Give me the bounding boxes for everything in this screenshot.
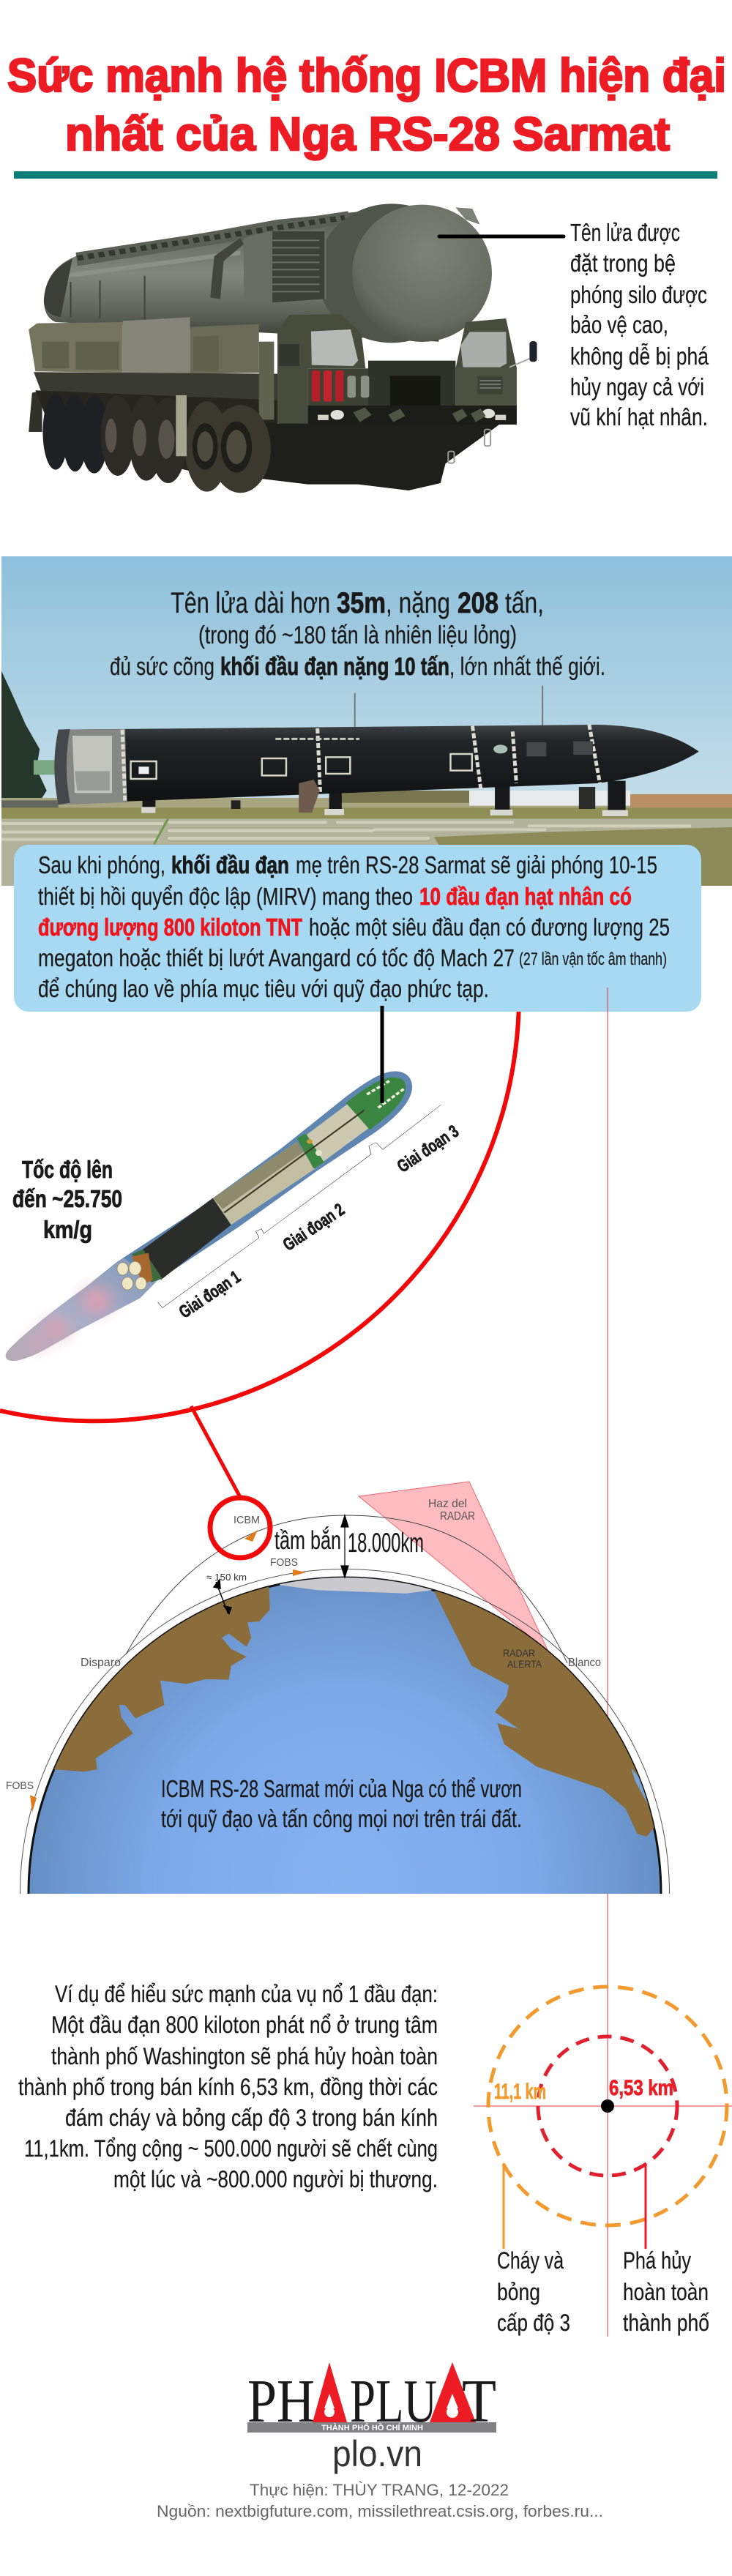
radius labels: 11,1 km bbox=[494, 2080, 546, 2104]
text: rocket specifications: khối đầu đạn nặng 10 tấn bbox=[220, 653, 449, 681]
credits bbox=[157, 2481, 603, 2520]
legend: burn zone bbox=[497, 2247, 570, 2336]
site name: plo.vn bbox=[332, 2433, 422, 2474]
diagram labels: FOBS bbox=[6, 1780, 34, 1792]
text: silo protection bbox=[570, 219, 709, 430]
range label: 18.000km bbox=[348, 1528, 424, 1558]
text: global reach bbox=[161, 1775, 522, 1832]
text: rocket specifications: Tên lửa dài hơn bbox=[171, 587, 330, 619]
text: rocket specifications: đủ sức cõng bbox=[110, 653, 214, 681]
text: top speed: đến ~25.750 bbox=[12, 1185, 122, 1212]
diagram labels: ≈ 150 km bbox=[206, 1572, 247, 1583]
panel: warhead explanation: (27 lần vận tốc âm thanh) bbox=[519, 949, 667, 969]
text: top speed: Tốc độ lên bbox=[22, 1156, 113, 1183]
legend: burn zone: bỏng bbox=[497, 2279, 540, 2305]
diagram labels: Haz del bbox=[428, 1498, 467, 1510]
diagram: blast radius circles bbox=[488, 1987, 727, 2249]
missile callout line bbox=[381, 1006, 384, 1103]
text: blast example: 11,1km. Tổng cộng ~ 500.000 người sẽ chết cùng bbox=[24, 2135, 438, 2162]
range arrow bbox=[341, 1515, 348, 1578]
legend: destruction zone bbox=[623, 2247, 709, 2336]
title: nhất của Nga RS-28 Sarmat bbox=[65, 108, 670, 160]
logo: Pháp Luật: THÀNH PHỐ HỒ CHÍ MINH bbox=[321, 2422, 423, 2433]
land: right continent bbox=[434, 1591, 654, 1837]
text: blast example: thành phố Washington sẽ phá hủy hoàn toàn bbox=[51, 2043, 438, 2069]
diagram labels bbox=[6, 1498, 601, 1792]
text: blast example: đám cháy và bỏng cấp độ 3 trong bán kính bbox=[65, 2105, 438, 2131]
logo: Pháp Luật: T bbox=[462, 2367, 496, 2435]
text: silo protection: bảo vệ cao, bbox=[570, 311, 668, 338]
text: rocket specifications bbox=[110, 587, 605, 681]
stage labels: Giai đoạn 1 bbox=[176, 1267, 244, 1323]
logo: Pháp Luật bbox=[247, 2362, 496, 2435]
credits: Thực hiện: THÙY TRANG, 12-2022 bbox=[250, 2481, 509, 2499]
panel: warhead explanation: khối đầu đạn bbox=[171, 851, 289, 878]
text: blast example: Ví dụ để hiểu sức mạnh của vụ nổ 1 đầu đạn: bbox=[55, 1981, 438, 2007]
stage brackets bbox=[158, 1105, 441, 1308]
text: top speed bbox=[12, 1156, 122, 1243]
text: global reach: ICBM RS-28 Sarmat mới của Nga có thể vươn bbox=[161, 1775, 522, 1802]
panel: warhead explanation: đương lượng 800 kiloton TNT bbox=[38, 914, 302, 941]
text: rocket specifications: , lớn nhất thế giới. bbox=[449, 653, 605, 681]
text: blast example: Một đầu đạn 800 kiloton phát nổ ở trung tâm bbox=[51, 2012, 438, 2038]
text: global reach: tới quỹ đạo và tấn công mọi nơi trên trái đất. bbox=[161, 1805, 522, 1832]
text: rocket specifications: tấn, bbox=[505, 587, 544, 619]
panel: warhead explanation bbox=[14, 845, 701, 1012]
large red circle arc bbox=[0, 996, 519, 1421]
stage labels: Giai đoạn 2 bbox=[280, 1200, 348, 1255]
diagram labels: RADAR bbox=[503, 1647, 535, 1659]
stage labels bbox=[176, 1121, 463, 1323]
panel: warhead explanation: để chúng lao về phía mục tiêu với quỹ đạo phức tạp. bbox=[38, 975, 489, 1002]
diagram: blast radius circles: 6,53 km bbox=[609, 2076, 673, 2100]
text: top speed: km/g bbox=[43, 1216, 92, 1243]
text: silo protection: đặt trong bệ bbox=[570, 250, 676, 277]
ice cap bbox=[280, 1578, 432, 1594]
text: blast example bbox=[18, 1981, 438, 2192]
text: rocket specifications: (trong đó ~180 tấn là nhiên liệu lỏng) bbox=[198, 621, 517, 649]
panel: warhead explanation: megaton hoặc thiết bị lướt Avangard có tốc độ Mach 27 bbox=[38, 944, 515, 971]
range label bbox=[274, 1526, 424, 1558]
diagram labels: Disparo bbox=[81, 1657, 121, 1669]
legend: destruction zone: hoàn toàn bbox=[623, 2279, 709, 2305]
text: rocket specifications: 35m bbox=[337, 587, 386, 619]
text: rocket specifications: 208 bbox=[458, 587, 498, 619]
legend: burn zone: cấp độ 3 bbox=[497, 2310, 570, 2336]
stage labels: Giai đoạn 3 bbox=[394, 1121, 463, 1177]
panel: warhead explanation: thiết bị hồi quyển độc lập (MIRV) mang theo bbox=[38, 883, 413, 910]
thin red guide line bbox=[474, 988, 732, 2337]
logo: Pháp Luật: PLU bbox=[350, 2367, 437, 2435]
radar beam bbox=[359, 1482, 548, 1651]
diagram: earth with trajectories bbox=[6, 1482, 691, 2218]
logo: Pháp Luật: PH bbox=[247, 2367, 315, 2435]
leader lines bbox=[502, 2163, 505, 2249]
text: silo protection: Tên lửa được bbox=[570, 219, 680, 246]
red connector line bbox=[191, 1406, 240, 1497]
diagram labels: ALERTA bbox=[507, 1658, 542, 1670]
panel: warhead explanation: Sau khi phóng, bbox=[38, 851, 165, 878]
text: rocket specifications: , nặng bbox=[386, 587, 450, 619]
ballistic trajectory bbox=[126, 1515, 567, 1663]
panel: rocket photo bbox=[1, 556, 732, 893]
diagram labels: FOBS bbox=[270, 1556, 298, 1569]
legend: destruction zone: Phá hủy bbox=[623, 2247, 691, 2274]
range label: tầm bắn bbox=[274, 1526, 341, 1555]
diagram labels: RADAR bbox=[440, 1510, 475, 1523]
diagram labels: ICBM bbox=[234, 1514, 260, 1526]
ICBM highlight ring bbox=[210, 1498, 270, 1558]
legend: destruction zone: thành phố bbox=[623, 2310, 709, 2336]
land: left continent bbox=[54, 1587, 270, 1772]
diagram labels: Blanco bbox=[568, 1657, 601, 1669]
altitude arrow bbox=[214, 1580, 231, 1614]
legend: burn zone: Cháy và bbox=[497, 2247, 564, 2274]
credits: Nguồn: nextbigfuture.com, missilethreat.csis.org, forbes.ru... bbox=[157, 2502, 603, 2520]
illustration: missile launcher truck bbox=[29, 204, 537, 493]
text: blast example: thành phố trong bán kính 6,53 km, đồng thời các bbox=[18, 2074, 438, 2100]
callout leader line bbox=[439, 234, 564, 239]
text: blast example: một lúc và ~800.000 người bị thương. bbox=[113, 2166, 438, 2192]
panel: warhead explanation: 10 đầu đạn hạt nhân có bbox=[419, 883, 632, 910]
title bbox=[7, 49, 726, 160]
orange trajectory arrows bbox=[30, 1530, 306, 1812]
illustration: missile cutaway bbox=[6, 1071, 412, 1361]
